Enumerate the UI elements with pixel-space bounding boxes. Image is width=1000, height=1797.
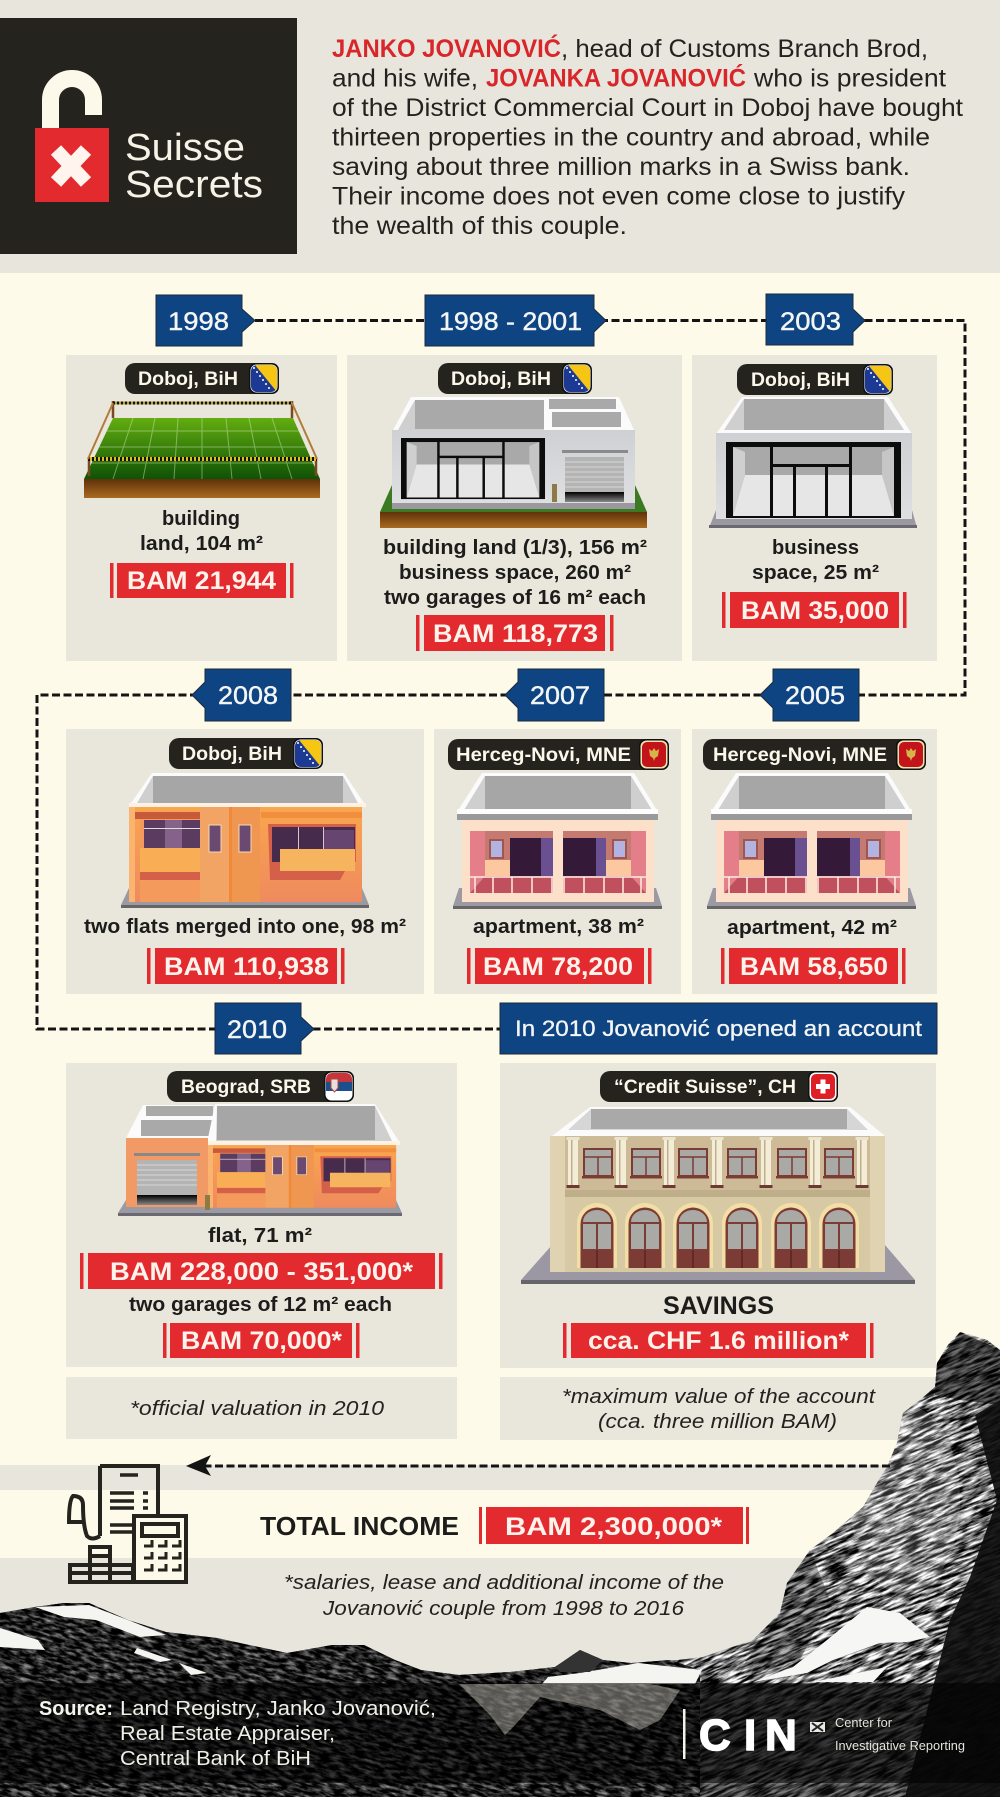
illustration: building with garage <box>380 397 647 528</box>
footer dark band <box>0 1683 1000 1783</box>
logo: Suisse Secrets: Suisse <box>125 127 245 169</box>
caption: flat: flat, 71 m² <box>208 1225 312 1247</box>
intro text: and his wife, <box>332 64 478 92</box>
intro text: Their income does not even come close to justify <box>332 182 906 210</box>
logo: CIN: Investigative Reporting <box>835 1738 965 1753</box>
panel: land 1998 <box>66 355 337 661</box>
tag: 1998 - 2001 <box>425 295 606 346</box>
note: official valuation: *official valuation in 2010 <box>130 1398 384 1420</box>
illustration: bank building <box>521 1107 915 1284</box>
note: maximum value <box>500 1377 936 1440</box>
location pill: Doboj: Doboj, BiH <box>138 369 238 390</box>
banner: account opened: In 2010 Jovanović opened an account <box>515 1016 922 1041</box>
panel: apartment 2005 <box>692 729 937 994</box>
location pill: Doboj: Doboj, BiH <box>751 370 850 391</box>
caption: two flats merged into one, 98 m² <box>84 916 406 938</box>
price: BAM 78,200: BAM 78,200 <box>483 953 633 981</box>
tag: 2005: 2005 <box>785 682 845 710</box>
location pill: Beograd <box>167 1071 354 1102</box>
panel: apartment 2007 <box>434 729 681 994</box>
timeline dashed connector <box>37 320 965 1029</box>
mountain: Matterhorn peak <box>672 1332 1000 1797</box>
price: total income <box>479 1507 749 1544</box>
caption: two garages of 16 m² each <box>384 587 646 609</box>
intro text <box>332 33 963 240</box>
intro text: JOVANKA JOVANOVIĆ <box>486 62 746 92</box>
bottom section background <box>0 1465 1000 1797</box>
logo: CIN <box>683 1709 965 1760</box>
price: BAM 70,000 <box>163 1323 360 1358</box>
tag: 1998 - 2001: 1998 - 2001 <box>439 308 582 336</box>
price: BAM 228,000 - 351,000 <box>80 1253 442 1289</box>
caption: business space, 260 m² <box>399 562 631 584</box>
tag: 2008: 2008 <box>218 682 278 710</box>
location pill: Doboj <box>169 738 323 769</box>
price: BAM 228,000 - 351,000: BAM 228,000 - 351,000* <box>110 1258 413 1286</box>
price: BAM 58,650 <box>721 948 906 984</box>
tag: 1998: 1998 <box>168 308 229 336</box>
tag: 2007 <box>505 669 604 721</box>
price: BAM 110,938: BAM 110,938 <box>164 953 329 981</box>
intro text: JANKO JOVANOVIĆ <box>332 33 561 63</box>
location pill: Herceg-Novi <box>703 739 926 770</box>
caption: apartment, 38 m² <box>473 916 644 938</box>
location pill: Doboj <box>125 363 279 394</box>
location pill: Doboj <box>737 364 893 395</box>
intro text: the wealth of this couple. <box>332 212 627 240</box>
location pill: Credit Suisse <box>600 1071 838 1102</box>
caption <box>752 537 879 584</box>
footnote: income: *salaries, lease and additional income of the <box>284 1572 724 1594</box>
logo: Suisse Secrets <box>0 18 297 254</box>
location pill: Doboj: Doboj, BiH <box>451 369 551 390</box>
caption: garages: two garages of 12 m² each <box>129 1294 392 1316</box>
intro text: , head of Customs Branch Brod, <box>561 35 928 63</box>
caption: savings: SAVINGS <box>663 1292 774 1320</box>
price: BAM 35,000: BAM 35,000 <box>741 597 889 625</box>
price: CHF 1.6 million: cca. CHF 1.6 million* <box>588 1327 849 1355</box>
intro text: of the District Commercial Court in Doboj have bought <box>332 94 963 122</box>
intro text: who is president <box>753 64 946 92</box>
panel: Credit Suisse savings <box>500 1063 936 1368</box>
intro text: thirteen properties in the country and abroad, while <box>332 124 930 152</box>
illustration: shop <box>709 397 917 528</box>
tag: 2005 <box>760 669 859 721</box>
source: Source: <box>39 1698 113 1720</box>
illustration: apartment <box>453 773 662 909</box>
tag: 2007: 2007 <box>530 682 590 710</box>
illustration: apartment <box>707 773 916 909</box>
caption: apartment, 42 m² <box>727 917 897 939</box>
panel: business space 2003 <box>692 355 937 661</box>
source <box>39 1698 436 1770</box>
caption: building land (1/3), 156 m² <box>383 537 647 559</box>
panel: flat 2010 <box>66 1063 457 1367</box>
price: BAM 70,000: BAM 70,000* <box>181 1327 342 1355</box>
price: BAM 118,773 <box>416 615 614 651</box>
caption: land, 104 m² <box>140 533 263 555</box>
price: BAM 58,650: BAM 58,650 <box>740 953 888 981</box>
valley <box>459 1684 680 1735</box>
footnote: income: Jovanović couple from 1998 to 2016 <box>322 1598 685 1620</box>
price: BAM 21,944 <box>110 563 294 598</box>
mountain: left range <box>0 1600 702 1797</box>
location pill: Credit Suisse: “Credit Suisse”, CH <box>614 1077 796 1098</box>
price: BAM 110,938 <box>147 948 344 984</box>
header band <box>0 0 1000 273</box>
price: BAM 21,944: BAM 21,944 <box>127 567 276 595</box>
tag: 2010: 2010 <box>227 1016 287 1044</box>
location pill: Herceg-Novi <box>448 739 669 770</box>
note: maximum value: *maximum value of the account <box>562 1386 877 1408</box>
source: Land Registry, Janko Jovanović, <box>120 1698 436 1720</box>
caption <box>140 508 263 555</box>
logo: CIN: Center for <box>835 1715 893 1730</box>
price: CHF 1.6 million <box>563 1323 874 1358</box>
total income label: TOTAL INCOME <box>260 1511 459 1541</box>
tag: 2003 <box>766 294 865 345</box>
location pill: Beograd: Beograd, SRB <box>181 1077 311 1098</box>
caption: space, 25 m² <box>752 562 879 584</box>
caption: business <box>772 537 859 559</box>
location pill: Doboj <box>438 363 592 394</box>
caption <box>383 537 647 609</box>
panel: flats 2008 <box>66 729 424 994</box>
price: BAM 78,200 <box>467 948 652 984</box>
price: BAM 118,773: BAM 118,773 <box>433 620 598 648</box>
illustration: building land plot <box>84 401 320 498</box>
tag: 2008 <box>192 669 291 721</box>
price: BAM 35,000 <box>722 592 906 628</box>
location pill: Herceg-Novi: Herceg-Novi, MNE <box>713 745 887 766</box>
logo: CIN: CIN <box>699 1711 797 1760</box>
note: official valuation <box>66 1377 457 1439</box>
total income arrow <box>186 1455 890 1476</box>
intro text: saving about three million marks in a Swiss bank. <box>332 153 910 181</box>
mountains illustration <box>0 1330 1000 1797</box>
source: Central Bank of BiH <box>120 1748 311 1770</box>
footnote: income <box>284 1572 724 1620</box>
logo: Suisse Secrets: Secrets <box>125 164 263 206</box>
tag: 1998 <box>156 295 255 346</box>
illustration: orange house <box>121 773 369 908</box>
source: Real Estate Appraiser, <box>120 1723 335 1745</box>
banner: account opened <box>500 1003 937 1054</box>
tag: 2003: 2003 <box>780 308 841 336</box>
caption: building <box>162 508 240 530</box>
location pill: Doboj: Doboj, BiH <box>182 744 282 765</box>
price: total income: BAM 2,300,000* <box>505 1513 722 1541</box>
icon: receipt and calculator <box>69 1466 186 1582</box>
illustration: orange house with garage <box>118 1104 402 1216</box>
panel: business space 1998-2001 <box>347 355 682 661</box>
note: maximum value: (cca. three million BAM) <box>598 1411 837 1433</box>
location pill: Herceg-Novi: Herceg-Novi, MNE <box>456 745 631 766</box>
tag: 2010 <box>215 1003 314 1054</box>
